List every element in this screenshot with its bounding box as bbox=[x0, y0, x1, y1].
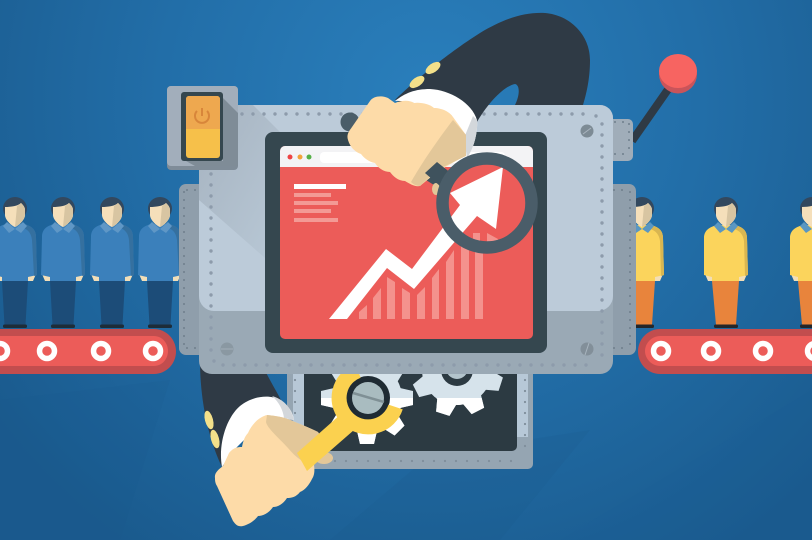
lower gear box bbox=[287, 374, 533, 469]
growth bars bbox=[359, 232, 483, 319]
magnifying glass lens bbox=[436, 152, 538, 254]
right conveyor belt bbox=[638, 329, 812, 374]
upper arm sleeve bbox=[395, 13, 590, 130]
power switch bbox=[167, 86, 238, 170]
left conveyor belt bbox=[0, 329, 176, 374]
blue people queue bbox=[0, 197, 182, 328]
fist bbox=[215, 415, 326, 526]
browser dots bbox=[288, 154, 292, 160]
text lines bbox=[294, 184, 346, 222]
magnifier stub bbox=[425, 162, 452, 186]
wrench bbox=[297, 371, 396, 471]
upper hand bbox=[347, 89, 477, 195]
yellow people queue bbox=[620, 197, 812, 328]
magnifier handle bbox=[340, 112, 447, 185]
lower arm sleeve bbox=[200, 360, 282, 467]
power icon bbox=[195, 108, 209, 123]
screws bbox=[220, 124, 594, 356]
shirt cuff bbox=[395, 89, 477, 158]
gears bbox=[321, 374, 503, 444]
side panels bbox=[179, 119, 636, 355]
shirt cuff bbox=[221, 397, 294, 467]
growth arrow bbox=[329, 167, 503, 319]
thumb bbox=[315, 452, 333, 464]
lever bbox=[632, 54, 697, 141]
lower hand with wrench bbox=[215, 371, 396, 526]
machine body bbox=[199, 105, 613, 374]
fist bbox=[347, 96, 466, 186]
screen bbox=[265, 132, 547, 353]
